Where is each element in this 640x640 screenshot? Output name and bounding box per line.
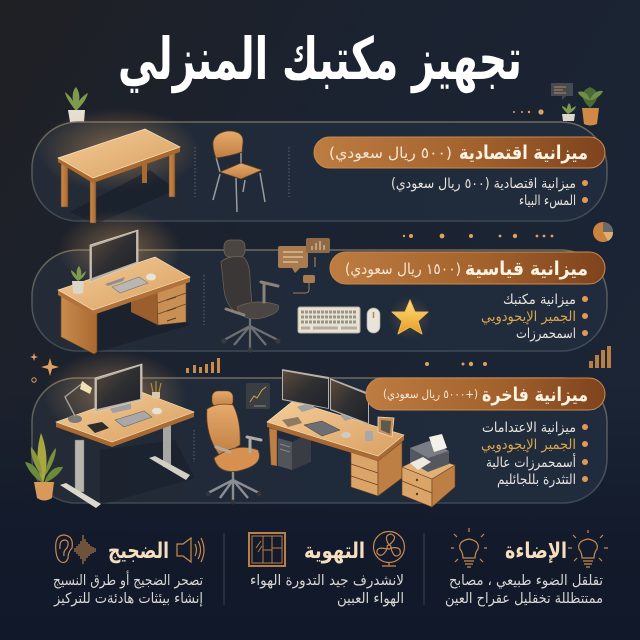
icon: orange potted plant <box>578 87 603 126</box>
icon: speaker <box>177 538 204 562</box>
heading pill: luxury: ميزانية فاخرة <box>482 384 588 406</box>
icon: chat bubble top right <box>551 83 573 100</box>
panel: standard budget <box>32 210 607 354</box>
icon: glow behind table <box>36 108 200 192</box>
illustration: ergonomic chair <box>221 240 281 353</box>
panel: economy budget <box>32 108 607 224</box>
bullet list: standard <box>481 292 588 342</box>
heading pill: luxury <box>366 378 605 410</box>
bullet list: standard: ميزانية مكتبك <box>503 292 576 308</box>
icon: chart tile <box>246 383 270 409</box>
bullet list: standard: اسمحمرزات <box>516 326 576 342</box>
bullet list: luxury: أسمحمرزات عالية <box>486 453 576 471</box>
icon: mouse <box>367 308 380 333</box>
icon: small plant <box>562 103 576 121</box>
dotted separator <box>203 275 205 325</box>
icon: glow behind monitor <box>43 351 187 439</box>
icon: light bulb right <box>568 530 608 567</box>
heading pill: luxury: (+٥٠٠٠ ريال سعودي) <box>383 387 478 402</box>
decorative dots row 1 <box>513 109 544 115</box>
icon: fan <box>374 532 404 566</box>
text: lighting description <box>445 573 603 607</box>
text: ventilation description <box>250 573 404 607</box>
icon: potted plant <box>25 433 63 500</box>
bar chart: right <box>589 346 611 368</box>
bullet list: luxury <box>481 420 588 488</box>
section: ventilation <box>249 532 404 607</box>
illustration: standing desk <box>56 364 195 508</box>
icon: sound wave <box>75 535 95 564</box>
decorative dots row 2 <box>403 234 553 238</box>
decorative dots row 3 <box>425 362 487 366</box>
dotted separators <box>195 147 289 197</box>
heading pill: economy <box>314 137 605 168</box>
heading pill: economy: ميزانية اقتصادية <box>459 142 588 164</box>
heading: noise: الضجيج <box>108 539 169 564</box>
dividers <box>224 533 424 605</box>
bullet list: standard: الجمير الإيحودويي <box>481 309 576 325</box>
illustration: L desk with dual monitors <box>267 369 404 496</box>
bullet list: economy <box>391 176 588 209</box>
illustration: simple chair <box>213 131 265 212</box>
illustration: cabinet and printer <box>402 434 455 507</box>
bullet list: luxury: التثدرة بللجائليم <box>497 472 576 488</box>
icon: star <box>388 296 432 340</box>
heading pill: standard <box>330 252 605 284</box>
text: noise description: تصحر الضجيج أو طرق النسيج <box>53 570 203 589</box>
icon: pie chart <box>593 222 613 242</box>
heading pill: economy: (٥٠٠ ريال سعودي) <box>329 144 452 163</box>
icon: glow behind monitor <box>58 210 182 290</box>
text: lighting description: تقلقل الضوء طبيعي ، مصابح <box>449 573 603 589</box>
illustration: desk with monitor <box>58 230 190 354</box>
section: lighting <box>445 528 608 607</box>
heading pill: standard: ميزانية قياسية <box>465 258 588 280</box>
bullet list: economy: ميزانية اقتصادية (٥٠٠ ريال سعودي) <box>391 176 576 192</box>
bullet list: luxury: ميزانية الاعتدامات <box>482 420 576 436</box>
icon: light bulb left <box>451 528 487 567</box>
bar chart: left <box>186 358 220 373</box>
text: noise description: إنشاء بيئثات هادئةت للتركيز <box>53 591 203 607</box>
text: ventilation description: لانشدرف جيد التدورة الهواء <box>250 573 404 589</box>
panel: luxury budget <box>25 351 607 508</box>
icon: keyboard <box>298 307 360 333</box>
icon: plant top left <box>65 87 88 122</box>
illustration: simple table <box>58 129 180 224</box>
icon: window <box>249 533 285 566</box>
bullet list: economy: المسء البياء <box>519 193 576 209</box>
illustration: mesh ergonomic chair <box>206 391 261 504</box>
heading: ventilation: التهوية <box>304 539 365 564</box>
dotted separator <box>193 430 195 462</box>
icon: chat bubbles and connector <box>278 238 330 293</box>
heading: lighting: الإضاءة <box>505 539 567 564</box>
section: noise <box>53 535 204 607</box>
text: ventilation description: الهواء العبين <box>337 591 404 607</box>
text: noise description <box>53 570 203 607</box>
bullet list: luxury: الجمير الإيجودويي <box>481 437 576 453</box>
text: lighting description: ممتتظللة تخقليل عقراح العين <box>445 591 603 607</box>
decorative sparkles <box>30 353 59 382</box>
heading pill: standard: (١٥٠٠ ريال سعودي) <box>345 260 461 279</box>
icon: ear <box>56 535 72 562</box>
